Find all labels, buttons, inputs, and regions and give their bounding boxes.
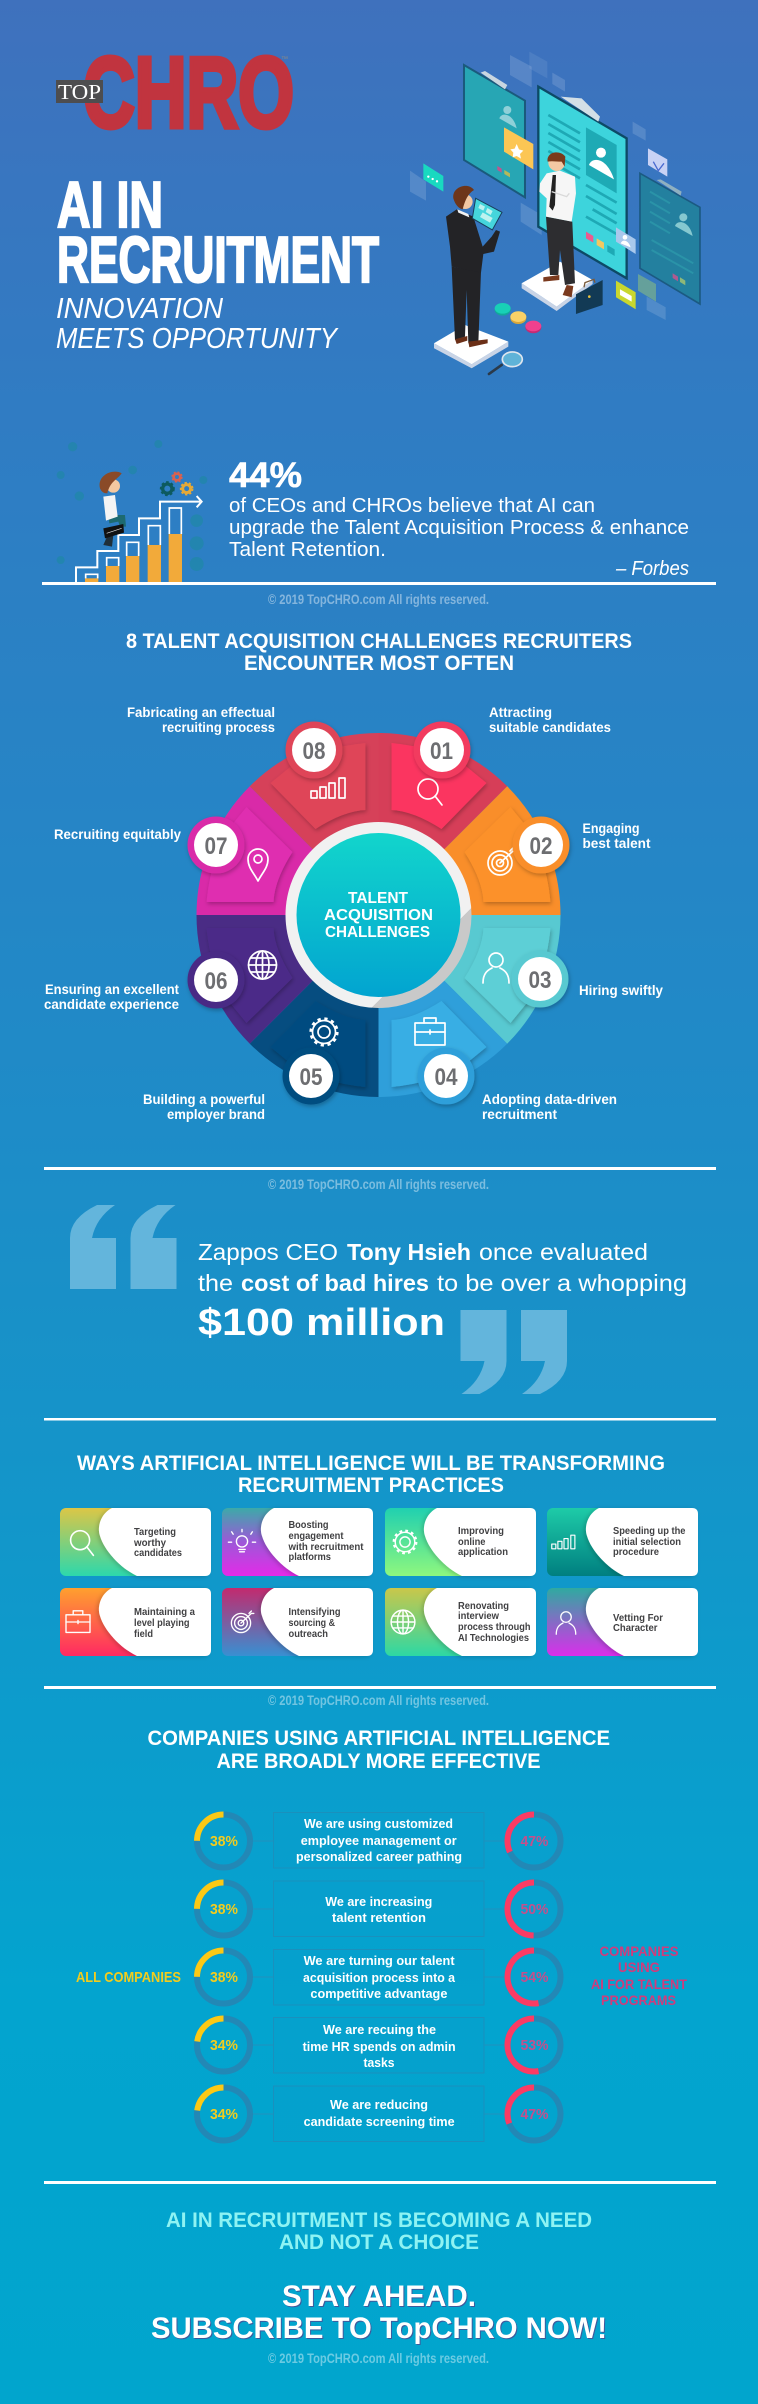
badge 08 [286,722,342,778]
icon: closing quote [460,1310,567,1394]
badge 06 [188,952,244,1008]
centre circle [286,822,472,1008]
row 2: We are increasing [325,1894,432,1909]
label 06: Ensuring an excellent [45,982,179,997]
label 05: Building a powerful [143,1092,265,1107]
badge 04 [418,1048,474,1104]
label 01 [489,705,611,735]
label 05: employer brand [167,1107,265,1122]
heading: 8 challenges: ENCOUNTER MOST OFTEN [244,652,514,675]
label 01: Attracting [489,705,552,720]
badge 07 [188,816,244,874]
icon: briefcase [415,1018,445,1045]
row 4: 53% [520,2037,548,2054]
icon: search [418,779,442,805]
logo: TopCHRO [56,37,294,149]
legend: all companies: ALL COMPANIES [76,1969,181,1986]
row 1: We are using customized [304,1816,453,1831]
row 4: time HR spends on admin [303,2039,456,2054]
heading: ways AI will transform: RECRUITMENT PRACTICES [238,1474,504,1497]
label 08 [127,705,275,735]
stat: 44%: – Forbes [615,558,689,580]
copyright: © 2019 TopCHRO.com All rights reserved. [268,592,489,607]
badge 05: 05 [300,1064,322,1091]
quote text: once evaluated [479,1239,648,1265]
icon: pin [248,849,268,881]
label 06 [44,982,179,1012]
card 5 [60,1588,211,1656]
closing statement: AND NOT A CHOICE [279,2231,479,2254]
stat: 44%: of CEOs and CHROs believe that AI can [229,495,595,517]
copyright: © 2019 TopCHRO.com All rights reserved. [268,1177,489,1192]
heading: ways AI will transform [77,1452,665,1497]
badge 02: 02 [530,833,552,860]
row 1 [197,1812,560,1868]
row 2 [197,1881,560,1936]
title: AI IN [57,168,163,241]
row 4: 34% [210,2037,238,2054]
logo: TopCHRO: TOP [58,80,101,104]
call to action: STAY AHEAD. [282,2280,476,2313]
label 04 [482,1092,617,1122]
stat: 44%: upgrade the Talent Acquisition Process & enhance [229,517,689,539]
centre circle: CHALLENGES [325,924,430,941]
title [56,168,379,355]
card 1: worthy [133,1537,166,1549]
label 04: recruitment [482,1107,557,1122]
quote text [198,1239,687,1344]
legend: companies using AI: PROGRAMS [601,1992,676,2008]
legend: companies using AI [591,1943,687,2008]
label 08: recruiting process [162,720,275,735]
label 07: Recruiting equitably [54,827,181,842]
card 4: Speeding up the [613,1525,686,1537]
card 1: Targeting [134,1526,176,1538]
badge 07: 07 [204,833,228,860]
badge 02 [512,816,570,874]
label 03: Hiring swiftly [579,983,663,998]
row 3 [197,1950,560,2005]
title: RECRUITMENT [57,223,379,296]
logo: TopCHRO: ™ [281,56,288,63]
icon: target [488,848,516,875]
legend: companies using AI: AI FOR TALENT [591,1976,687,1992]
icon: person [483,953,509,983]
card 3: online [458,1536,486,1548]
badge 01 [414,722,470,778]
badge 08: 08 [302,738,326,765]
card 2: Boosting [288,1519,328,1531]
card 7: AI Technologies [458,1632,529,1644]
card 2 [222,1508,373,1576]
card 2: with recruitment [288,1541,364,1553]
card 4: procedure [613,1546,659,1558]
legend: companies using AI: COMPANIES [600,1943,678,1959]
row 3: We are turning our talent [304,1953,455,1968]
card 3 [385,1508,536,1576]
badge 03: 03 [528,967,552,994]
card 5: level playing [134,1617,190,1629]
heading: companies using AI: ARE BROADLY MORE EFFECTIVE [216,1750,540,1773]
row 5: 47% [520,2106,548,2123]
wheel chart: talent acquisition challenges [44,705,663,1122]
closing statement [166,2209,592,2254]
stat illustration: person climbing bar chart stairs [57,440,207,584]
card 6 [222,1588,373,1656]
card 6: outreach [288,1628,328,1640]
card 4 [547,1508,698,1576]
call to action: SUBSCRIBE TO TopCHRO NOW! [151,2312,607,2345]
row 4: tasks [364,2055,394,2070]
card 8: Character [613,1622,658,1634]
badge 03 [512,950,568,1008]
row 3: 38% [210,1969,238,1986]
card 7: Renovating [458,1600,509,1612]
row 2: 38% [210,1901,238,1918]
label 01: suitable candidates [489,720,611,735]
closing statement: AI IN RECRUITMENT IS BECOMING A NEED [166,2209,592,2232]
illustration: recruiters and candidate clipboards [410,52,700,374]
cards: recruitment practices [60,1508,698,1656]
badge 04: 04 [434,1064,458,1091]
card 7: process through [458,1621,530,1633]
card 4: initial selection [613,1536,681,1548]
stat: 44%: 44% [229,456,302,495]
card 7: interview [458,1610,500,1622]
row 5: 34% [210,2106,238,2123]
copyright: © 2019 TopCHRO.com All rights reserved. [268,1693,489,1708]
card 2: engagement [288,1530,344,1542]
quote text: cost of bad hires [241,1270,429,1296]
label 05 [143,1092,265,1122]
card 3: application [458,1546,508,1558]
row 3: 54% [520,1969,548,1986]
centre circle: ACQUISITION [324,907,433,924]
row 3: acquisition process into a [303,1970,456,1985]
row 5: candidate screening time [304,2114,455,2129]
card 6: Intensifying [288,1606,340,1618]
heading: ways AI will transform: WAYS ARTIFICIAL INTELLIGENCE WILL BE TRANSFORMING [77,1452,665,1475]
icon: opening quote [70,1205,176,1289]
label 02: Engaging [582,821,640,836]
icon: globe [248,951,276,979]
row 4 [197,2018,560,2073]
card 8: Vetting For [613,1612,663,1624]
copyright: © 2019 TopCHRO.com All rights reserved. [268,2351,489,2366]
label 08: Fabricating an effectual [127,705,275,720]
comparison chart: all companies vs AI programs [76,1812,687,2142]
card 2: platforms [288,1551,331,1563]
row 1: 47% [520,1833,548,1850]
heading: companies using AI: COMPANIES USING ARTIFICIAL INTELLIGENCE [148,1727,610,1750]
row 3: competitive advantage [310,1986,447,2001]
quote text: Tony Hsieh [347,1239,471,1265]
call to action [151,2280,607,2345]
row 5 [197,2086,560,2142]
stat: 44%: Talent Retention. [229,539,386,561]
card 5: field [134,1628,153,1640]
title: INNOVATION [56,293,223,325]
row 1: employee management or [301,1833,457,1848]
quote text: Zappos CEO [198,1239,338,1265]
card 8 [547,1588,698,1656]
row 5: We are reducing [330,2097,428,2112]
row 2: 50% [520,1901,548,1918]
card 3: Improving [458,1525,504,1537]
quote text: the [198,1270,233,1296]
card 7 [385,1588,536,1656]
label 06: candidate experience [44,997,179,1012]
quote text: to be over a whopping [437,1270,687,1296]
icon: gear [311,1019,337,1045]
label 02: best talent [582,836,651,851]
logo: TopCHRO: CHRO [83,37,294,149]
stat: 44% [229,456,689,580]
row 1: 38% [210,1833,238,1850]
heading: 8 challenges: 8 TALENT ACQUISITION CHALLENGES RECRUITERS [126,630,632,653]
row 1: personalized career pathing [296,1849,462,1864]
title: MEETS OPPORTUNITY [56,323,339,355]
badge 06: 06 [204,968,228,995]
heading: 8 challenges [126,630,632,675]
quote text: $100 million [198,1302,445,1344]
card 5: Maintaining a [134,1606,195,1618]
centre circle: TALENT [348,890,408,907]
heading: companies using AI [148,1727,610,1773]
badge 01: 01 [430,738,453,765]
card 1: candidates [134,1547,182,1559]
legend: companies using AI: USING [618,1959,660,1975]
row 4: We are recuing the [323,2022,436,2037]
label 02 [582,821,651,851]
card 6: sourcing & [288,1617,335,1629]
wheel segments [196,733,561,1097]
row 2: talent retention [332,1910,426,1925]
icon: bars [311,778,345,798]
label 04: Adopting data-driven [482,1092,617,1107]
badge 05 [282,1048,340,1104]
card 1 [60,1508,211,1576]
